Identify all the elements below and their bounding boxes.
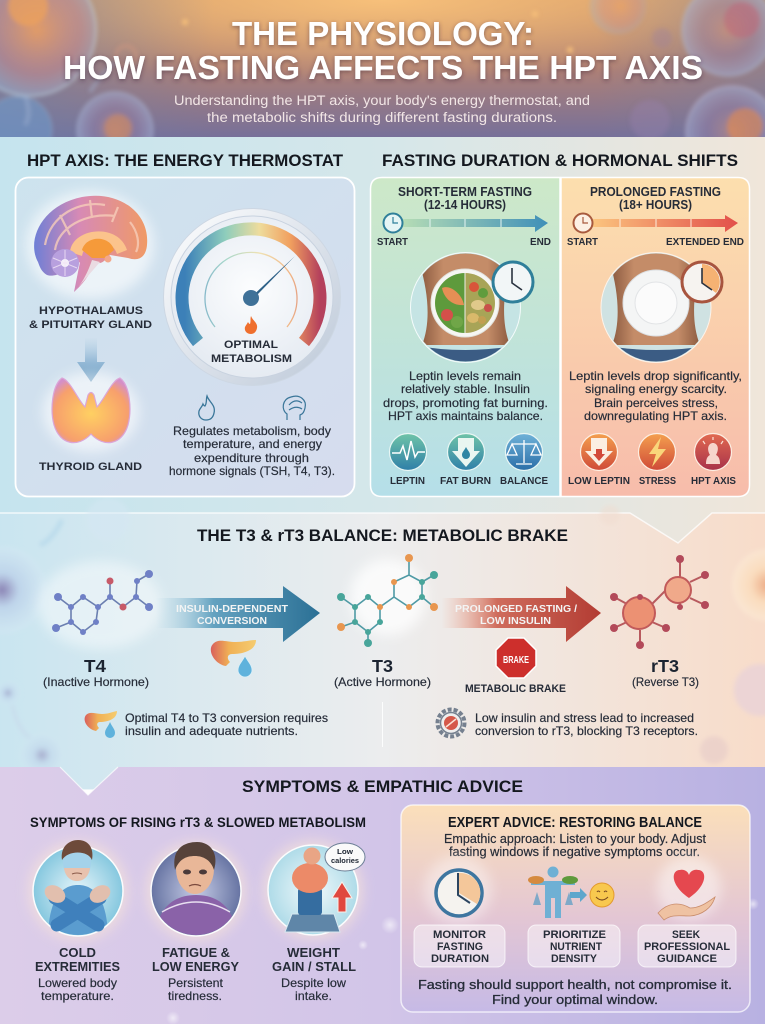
heading: prolonged: (18+ HOURS) — [619, 198, 692, 212]
icon: brake stop sign — [496, 638, 536, 678]
heading: symptoms and advice: SYMPTOMS & EMPATHIC ADVICE — [242, 777, 523, 796]
heading: HPT axis: HPT AXIS: THE ENERGY THERMOSTAT — [27, 152, 343, 170]
panel: prolonged fasting — [561, 178, 750, 496]
label: weight gain: Despite low — [281, 976, 346, 990]
icon: balance — [506, 434, 542, 470]
title: THE PHYSIOLOGY: — [232, 15, 534, 52]
text: prolonged description: downregulating HPT axis. — [584, 409, 727, 423]
label: hypothalamus: & PITUITARY GLAND — [29, 319, 152, 331]
label: weight gain — [272, 946, 356, 1003]
label: weight gain: intake. — [295, 989, 332, 1003]
icon: brain head outline — [283, 396, 305, 420]
text: empathic approach: fasting windows if negative symptoms occur. — [449, 845, 700, 859]
icon: heart in hand — [657, 856, 721, 920]
icon: clock monitor — [424, 856, 492, 924]
icon: leptin — [390, 434, 426, 470]
subtitle — [174, 93, 590, 125]
title — [63, 15, 703, 86]
heading: T3 balance: THE T3 & rT3 BALANCE: METABOLIC BRAKE — [197, 526, 568, 545]
symptom: cold extremities — [28, 840, 128, 941]
chip: prioritize: NUTRIENT — [550, 941, 602, 953]
subheading: symptoms: SYMPTOMS OF RISING rT3 & SLOWED METABOLISM — [30, 815, 366, 830]
label: T3: T3 — [372, 656, 393, 676]
chip: prioritize: DENSITY — [551, 953, 598, 965]
label: T3: (Active Hormone) — [334, 675, 431, 689]
chip: monitor: MONITOR — [433, 929, 486, 941]
text: optimal conversion — [125, 711, 328, 738]
illustration: torso with full plate — [410, 250, 533, 365]
molecule: rT3 — [610, 555, 709, 649]
text: closing message — [418, 977, 732, 1007]
subtitle: Understanding the HPT axis, your body's energy thermostat, and — [174, 93, 590, 108]
timeline: prolonged: START — [567, 237, 598, 248]
chip: seek guidance: PROFESSIONAL — [644, 941, 730, 953]
section background: HPT and fasting — [0, 137, 765, 547]
label: cold extremities: COLD — [59, 946, 96, 960]
panel: HPT axis — [16, 178, 354, 496]
timeline: prolonged: EXTENDED END — [666, 237, 744, 248]
arrow: prolonged fasting — [441, 586, 601, 642]
molecule: T4 — [38, 561, 162, 649]
chip: seek guidance — [638, 925, 736, 967]
icon: low leptin — [580, 434, 618, 470]
icon: pancreas and drop — [211, 640, 256, 677]
timeline: prolonged — [567, 214, 744, 248]
heading: expert advice: EXPERT ADVICE: RESTORING BALANCE — [448, 815, 702, 831]
timeline: short-term — [377, 214, 551, 248]
label: hypothalamus: HYPOTHALAMUS — [39, 305, 143, 317]
text: prolonged description — [569, 369, 742, 423]
text: closing message: Fasting should support health, not compromise it. — [418, 977, 732, 992]
label: fatigue — [152, 946, 240, 1003]
illustration: torso with empty plate — [601, 250, 722, 365]
panel: short-term fasting — [370, 178, 560, 496]
text: HPT description: hormone signals (TSH, T4, T3). — [169, 464, 335, 478]
icon: brake stop sign: BRAKE — [503, 654, 529, 666]
label: thyroid: THYROID GLAND — [39, 461, 142, 473]
text: low insulin: conversion to rT3, blocking T3 receptors. — [475, 724, 698, 738]
label: fat burn: FAT BURN — [440, 476, 491, 487]
text: prolonged description: signaling energy scarcity. — [585, 382, 727, 396]
icon: thyroid gland — [43, 372, 139, 452]
gauge: optimal metabolism — [164, 208, 340, 386]
text: low insulin: Low insulin and stress lead to increased — [475, 711, 694, 725]
arrow: insulin-dependent conversion: CONVERSION — [197, 616, 267, 627]
heading: short-term: SHORT-TERM FASTING — [398, 185, 532, 199]
chip: seek guidance: GUIDANCE — [657, 953, 717, 965]
text: empathic approach: Empathic approach: Listen to your body. Adjust — [444, 832, 707, 846]
label: cold extremities — [35, 946, 120, 1003]
label: fatigue: LOW ENERGY — [152, 960, 240, 974]
label: fatigue: tiredness. — [168, 989, 222, 1003]
arrow: prolonged fasting: LOW INSULIN — [480, 616, 551, 627]
text: short-term description: Leptin levels remain — [409, 369, 521, 383]
title: HOW FASTING AFFECTS THE HPT AXIS — [63, 49, 703, 86]
label: fatigue: Persistent — [168, 976, 224, 990]
chip: prioritize — [528, 925, 620, 967]
icon: gear with red cell — [438, 710, 464, 736]
heading: prolonged — [590, 185, 721, 212]
gauge: optimal metabolism: OPTIMAL — [224, 339, 278, 351]
section background: T3 balance — [0, 498, 765, 790]
label: T4: T4 — [84, 656, 106, 676]
subtitle: the metabolic shifts during different fasting durations. — [207, 110, 557, 125]
arrow: brain to thyroid — [77, 337, 105, 382]
text: prolonged description: Leptin levels drop significantly, — [569, 369, 742, 383]
icon: person balancing nutrients — [528, 866, 614, 918]
symptom: weight gain: calories — [331, 858, 359, 865]
chip: monitor: FASTING — [437, 941, 483, 953]
symptom: weight gain — [263, 840, 365, 940]
arrow: insulin-dependent conversion: INSULIN-DEPENDENT — [176, 604, 288, 615]
label: cold extremities: EXTREMITIES — [35, 960, 120, 974]
gauge: optimal metabolism: METABOLISM — [211, 353, 292, 365]
label: cold extremities: Lowered body — [38, 976, 117, 990]
chip: monitor: DURATION — [431, 953, 489, 965]
symptom: fatigue — [146, 841, 246, 941]
label: stress: STRESS — [639, 476, 676, 487]
label: rT3: (Reverse T3) — [632, 675, 699, 689]
icon: stress — [638, 434, 676, 470]
text: short-term description: drops, promoting fat burning. — [383, 396, 548, 410]
arrow: prolonged fasting: PROLONGED FASTING / — [455, 604, 577, 615]
molecule: T3 — [337, 554, 438, 647]
chip: seek guidance: SEEK — [672, 929, 700, 941]
label: rT3: rT3 — [651, 656, 679, 676]
text: HPT description: Regulates metabolism, body — [173, 424, 331, 438]
icon: brain — [26, 191, 154, 299]
chip: prioritize: PRIORITIZE — [543, 929, 606, 941]
label: cold extremities: temperature. — [41, 989, 114, 1003]
header background with cells — [0, 0, 765, 178]
text: empathic approach — [444, 832, 707, 859]
label: low leptin: LOW LEPTIN — [568, 476, 630, 487]
label: fatigue: FATIGUE & — [162, 946, 230, 960]
icon: pancreas small — [85, 711, 117, 738]
timeline: short-term: START — [377, 237, 408, 248]
label: T3 — [334, 656, 431, 689]
section background: symptoms and advice — [0, 767, 765, 1024]
label: weight gain: WEIGHT — [287, 946, 340, 960]
arrow: insulin-dependent conversion — [156, 586, 320, 642]
label: leptin: LEPTIN — [390, 476, 425, 487]
text: optimal conversion: insulin and adequate nutrients. — [125, 724, 298, 738]
divider between fasting panels — [560, 177, 561, 497]
text: short-term description — [383, 369, 548, 423]
label: T4: (Inactive Hormone) — [43, 675, 149, 689]
panel: expert advice — [401, 805, 750, 1012]
text: HPT description — [169, 424, 335, 478]
text: HPT description: temperature, and energy — [183, 437, 322, 451]
text: HPT description: expenditure through — [194, 451, 309, 465]
text: short-term description: relatively stable. Insulin — [401, 382, 530, 396]
label: rT3 — [632, 656, 699, 689]
text: low insulin — [475, 711, 698, 738]
label: metabolic brake: METABOLIC BRAKE — [465, 683, 566, 695]
text: short-term description: HPT axis maintains balance. — [388, 409, 543, 423]
heading: short-term — [398, 185, 532, 212]
heading: prolonged: PROLONGED FASTING — [590, 185, 721, 199]
text: optimal conversion: Optimal T4 to T3 conversion requires — [125, 711, 328, 725]
label: hpt axis: HPT AXIS — [691, 476, 736, 487]
icon: HPT axis — [694, 434, 732, 470]
timeline: short-term: END — [530, 237, 551, 248]
symptom: weight gain: Low — [337, 849, 354, 856]
label: weight gain: GAIN / STALL — [272, 960, 356, 974]
text: closing message: Find your optimal window. — [492, 992, 658, 1007]
text: prolonged description: Brain perceives stress, — [594, 396, 718, 410]
label: balance: BALANCE — [500, 476, 548, 487]
icon: flame outline — [199, 396, 214, 420]
heading: short-term: (12-14 HOURS) — [424, 198, 506, 212]
heading: fasting duration: FASTING DURATION & HORMONAL SHIFTS — [382, 152, 738, 170]
chip: monitor — [414, 925, 505, 967]
label: T4 — [43, 656, 149, 689]
icon: fat burn — [448, 434, 484, 470]
label: hypothalamus — [29, 305, 152, 331]
